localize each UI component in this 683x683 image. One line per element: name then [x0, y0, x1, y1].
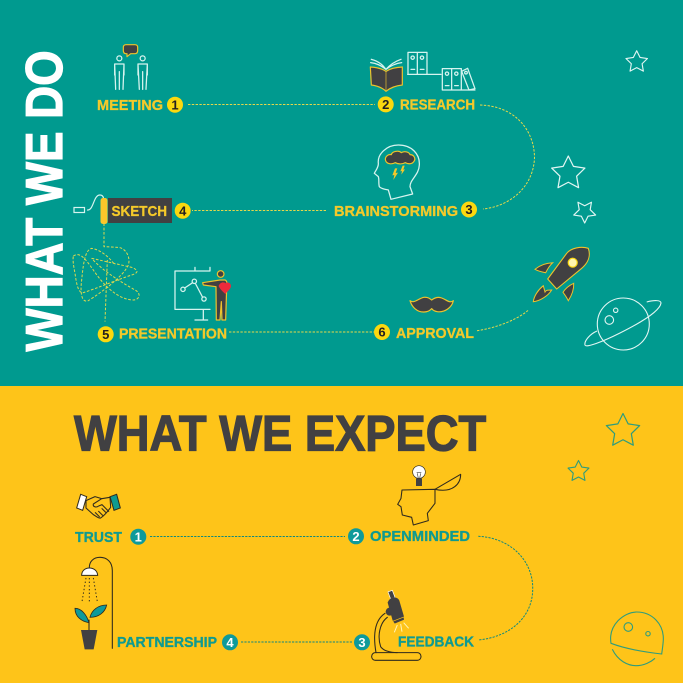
- connector: approval to rocket: [477, 310, 528, 331]
- connector: presentation to approval: [229, 331, 375, 333]
- icon: binders on shelves: [408, 52, 475, 90]
- label: openminded: OPENMINDED: [370, 528, 470, 545]
- step 1 badge: 1: [171, 97, 179, 112]
- icon: star large: [552, 156, 585, 188]
- icon: yellow panel small star: [568, 460, 589, 480]
- icon: head with storm brain: [374, 145, 419, 199]
- label: sketch on roller: [108, 198, 172, 223]
- step 1 badge: [130, 529, 146, 545]
- step 2 badge: [348, 528, 364, 544]
- step 2 badge: 2: [352, 529, 360, 544]
- step 4 badge: [222, 634, 238, 650]
- step 2 badge: 2: [382, 97, 389, 112]
- icon: microscope: [372, 590, 421, 660]
- panel: what we do background: [0, 0, 683, 386]
- icon: meeting people: [115, 45, 147, 89]
- step 3 badge: 3: [358, 635, 366, 650]
- icon: handshake: [77, 494, 120, 518]
- label: sketch on roller: SKETCH: [112, 203, 167, 220]
- connector: brainstorming to sketch: [192, 210, 326, 212]
- step 4 badge: [175, 203, 191, 219]
- label: meeting: MEETING: [97, 97, 163, 114]
- label: trust: TRUST: [75, 529, 122, 546]
- step 1 badge: 1: [135, 529, 142, 544]
- label: presentation: PRESENTATION: [119, 326, 227, 343]
- icon: ringed planet: [585, 298, 661, 350]
- icon: paint roller: [74, 195, 108, 224]
- title: what we do: WHAT WE DO: [16, 50, 74, 352]
- icon: shower and plant: [75, 557, 112, 649]
- icon: yellow panel planet: [611, 612, 663, 666]
- icon: presenter and chart board: [175, 267, 231, 320]
- connector: openminded to feedback: [478, 536, 533, 640]
- step 1 badge: [167, 97, 183, 113]
- step 3 badge: [461, 202, 477, 218]
- icon: rocket: [533, 247, 589, 302]
- connector: meeting to research: [188, 104, 375, 106]
- step 6 badge: 6: [378, 325, 386, 340]
- step 5 badge: [98, 326, 114, 342]
- label: feedback: FEEDBACK: [398, 634, 474, 651]
- step 3 badge: 3: [465, 202, 473, 217]
- icon: star top right: [626, 51, 647, 71]
- step 6 badge: [374, 324, 390, 340]
- step 4 badge: 4: [226, 635, 234, 650]
- icon: star small: [574, 202, 596, 223]
- icon: yellow panel large star: [606, 414, 640, 445]
- label: brainstorming: BRAINSTORMING: [334, 203, 458, 220]
- panel: what we expect background: [0, 386, 683, 683]
- connector: research to brainstorming: [480, 105, 534, 209]
- scribble sketch line: [73, 223, 139, 322]
- step 2 badge: [378, 96, 394, 112]
- step 5 badge: 5: [102, 327, 109, 342]
- label: research: RESEARCH: [400, 96, 475, 114]
- title: what we expect: WHAT WE EXPECT: [74, 407, 486, 462]
- icon: open head with light bulb: [398, 466, 461, 525]
- connector: trust to openminded: [150, 536, 345, 538]
- step 4 badge: 4: [179, 203, 187, 218]
- label: partnership: PARTNERSHIP: [117, 634, 217, 651]
- icon: moustache: [410, 297, 453, 312]
- connector: feedback to partnership: [240, 641, 352, 643]
- label: approval: APPROVAL: [396, 325, 474, 342]
- step 3 badge: [354, 634, 370, 650]
- icon: open book: [370, 59, 402, 91]
